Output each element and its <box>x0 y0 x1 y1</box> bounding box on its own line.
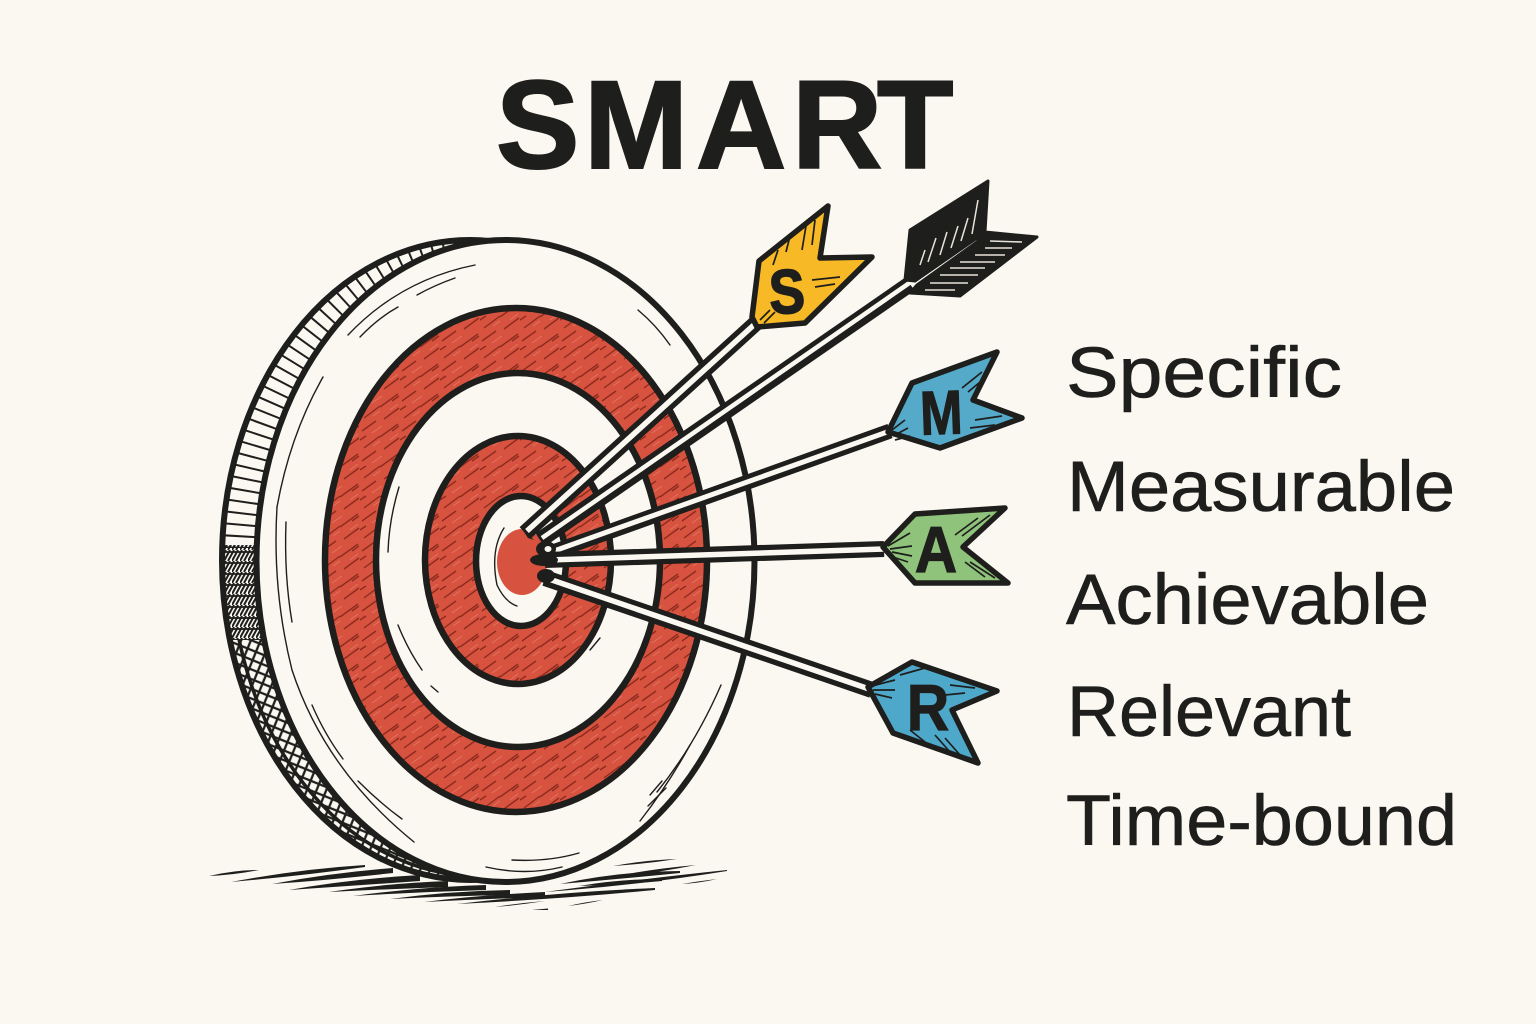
inner white ring <box>376 373 660 747</box>
R shaft <box>545 578 872 690</box>
M shaft <box>550 431 890 553</box>
target side shell <box>219 237 489 883</box>
black fletching <box>905 181 1037 296</box>
target face <box>256 240 754 882</box>
arrow black <box>540 181 1037 540</box>
word: Time-bound: Time-bound <box>1066 782 1457 861</box>
S fletching <box>752 206 872 327</box>
R fletching <box>868 662 997 763</box>
word: Specific: Specific <box>1066 334 1342 413</box>
sketch highlights <box>276 265 721 872</box>
bullseye <box>497 529 547 595</box>
arrow S <box>525 206 872 533</box>
black shaft <box>540 284 910 540</box>
A fletching <box>883 508 1008 583</box>
title: SMART <box>496 56 953 195</box>
arrow R <box>545 578 997 763</box>
outer red ring <box>325 308 707 812</box>
ground shadow <box>209 859 727 910</box>
centre white ring <box>476 496 566 626</box>
word: Measurable: Measurable <box>1067 448 1455 527</box>
arrow tips cluster <box>522 529 558 583</box>
target board <box>215 240 754 890</box>
word list <box>1066 334 1457 861</box>
word: Achievable: Achievable <box>1066 561 1429 640</box>
M letter: M <box>919 379 964 449</box>
R letter: R <box>907 672 949 745</box>
word: Relevant: Relevant <box>1067 673 1351 752</box>
A letter: A <box>915 514 957 587</box>
A shaft <box>545 549 884 560</box>
inner red ring <box>425 436 611 684</box>
S shaft <box>525 323 756 533</box>
S letter: S <box>767 257 806 328</box>
M fletching <box>888 352 1022 448</box>
arrow M <box>550 352 1022 553</box>
arrow A <box>545 508 1008 587</box>
